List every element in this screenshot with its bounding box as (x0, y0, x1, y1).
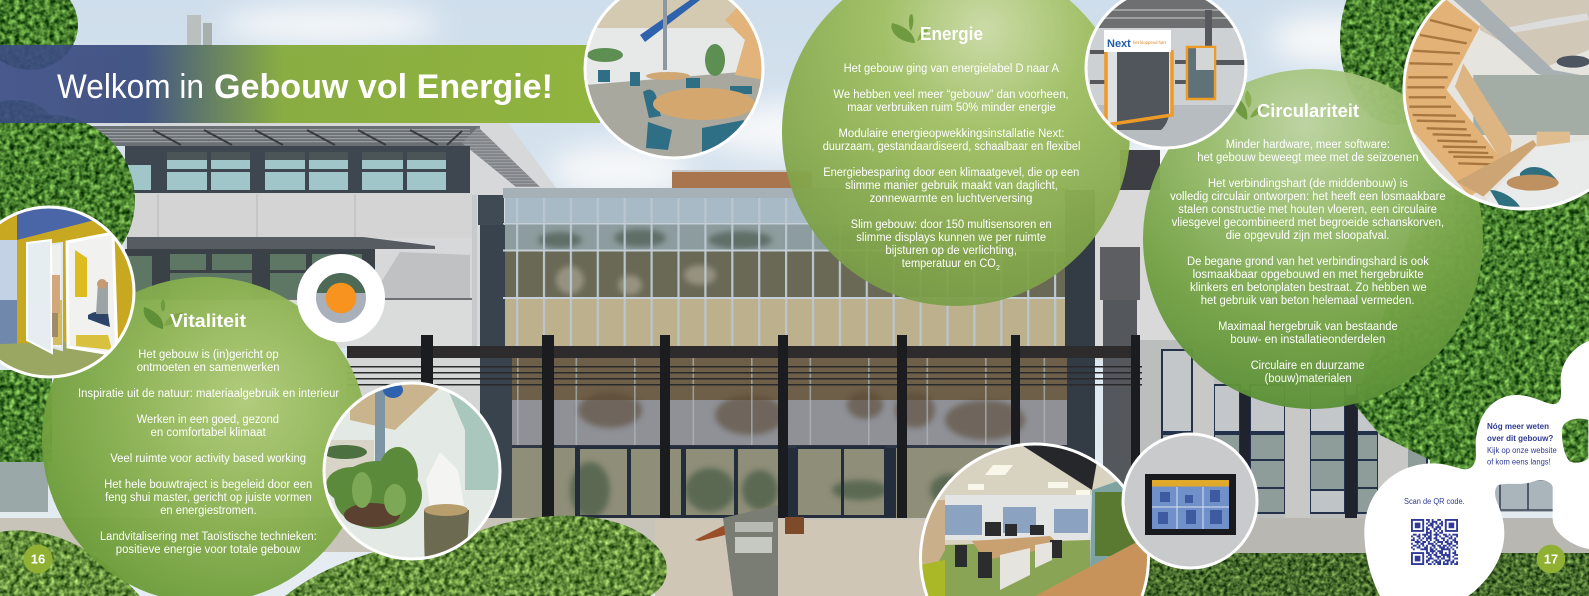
text: scan prompt: Scan de QR code. (1404, 496, 1465, 506)
text: Circulariteit bullets: Minder hardware, meer software: (1226, 139, 1390, 151)
text: Energie bullets: slimme displays kunnen we per ruimte (856, 232, 1046, 244)
text: Circulariteit bullets: losmaakbaar opgebouwd en met hergebruikte (1193, 269, 1424, 281)
text: Circulariteit bullets: het gebruik van beton helemaal vermeden. (1201, 295, 1414, 307)
text: Circulariteit bullets: De begane grond van het verbindingshard is ook (1187, 256, 1429, 268)
photo: Next installation (1086, 0, 1246, 150)
icon: target circle (297, 254, 385, 342)
text: Vitaliteit bullets: Werken in een goed, gezond (137, 414, 279, 426)
text: Circulariteit bullets: klinkers en betonplaten bestraat. Zo hebben we (1190, 282, 1427, 294)
text: Energie bullets: Het gebouw ging van energielabel D naar A (844, 63, 1059, 75)
heading: Vitaliteit: Vitaliteit (170, 311, 246, 331)
text: Vitaliteit bullets: Het gebouw is (in)gericht op (138, 349, 279, 361)
photo: open office (920, 444, 1150, 596)
text: more info: of kom eens langs! (1487, 457, 1551, 467)
photo: Next installation: Next (1107, 38, 1131, 50)
text: Circulariteit bullets: Het verbindingshart (de middenbouw) is (1208, 178, 1408, 190)
page number 17: 17 (1544, 552, 1558, 566)
heading: Energie: Energie (920, 24, 983, 44)
text: Energie bullets: maar verbruiken ruim 50% minder energie (847, 102, 1056, 114)
icon: leaves (891, 14, 929, 43)
text: Energie bullets: bijsturen op de verlichting, (885, 245, 1017, 257)
text: Vitaliteit bullets: ontmoeten en samenwerken (137, 362, 280, 374)
title banner (0, 45, 600, 123)
title: Welkom in (57, 68, 204, 106)
icon: leaves (144, 299, 183, 329)
text: more info: Kijk op onze website (1487, 445, 1557, 455)
text: Circulariteit bullets: stalen constructie met houten vloeren, een circulaire (1178, 204, 1437, 216)
icon: leaves (1233, 90, 1264, 120)
text: Circulariteit bullets: vliesgevel gecombineerd met begroeide schanskorven, (1172, 217, 1444, 229)
text: Energie bullets: 2 (996, 265, 1000, 272)
text: Vitaliteit bullets: Landvitalisering met Taoïstische technieken: (100, 531, 317, 543)
white info blob (1364, 341, 1589, 596)
text: Vitaliteit bullets: Veel ruimte voor activity based working (110, 453, 306, 465)
text: Energie bullets: Energiebesparing door een klimaatgevel, die op een (823, 167, 1079, 179)
text: more info: Nóg meer weten (1487, 421, 1549, 431)
text: Energie bullets: Slim gebouw: door 150 multisensoren en (851, 219, 1052, 231)
text: Circulariteit bullets: het gebouw beweegt mee met de seizoenen (1197, 152, 1419, 164)
text: Circulariteit bullets: (bouw)materialen (1264, 373, 1352, 385)
page number 17 (1537, 545, 1565, 573)
text: more info: over dit gebouw? (1487, 433, 1553, 443)
text: Vitaliteit bullets: positieve energie voor totale gebouw (116, 544, 301, 556)
photo: phone booths (0, 207, 134, 377)
text: Vitaliteit bullets: Inspiratie uit de natuur: materiaalgebruik en interieur (78, 388, 339, 400)
photo: plant and crystal (323, 382, 500, 562)
text: Energie bullets: duurzaam, gestandaardiseerd, schaalbaar en flexibel (823, 141, 1080, 153)
text: Circulariteit bullets: die opgevuld zijn met sloopafval. (1226, 230, 1390, 242)
text: Circulariteit bullets: Maximaal hergebruik van bestaande (1218, 321, 1398, 333)
text: more info (1487, 421, 1557, 467)
text: Energie bullets (823, 63, 1080, 272)
photo: Next installation: het kloppend hart (1133, 40, 1167, 45)
page number 16: 16 (31, 552, 45, 566)
text: Energie bullets: Modulaire energieopwekkingsinstallatie Next: (838, 128, 1064, 140)
text: Circulariteit bullets (1170, 139, 1446, 385)
photo: tablet display (1123, 434, 1257, 568)
text: Vitaliteit bullets: Het hele bouwtraject is begeleid door een (104, 479, 312, 491)
text: Circulariteit bullets: bouw- en installatieonderdelen (1230, 334, 1385, 346)
title bold part: Gebouw vol Energie! (214, 68, 553, 106)
text: Circulariteit bullets: volledig circulair ontworpen: het heeft een losmaakbare (1170, 191, 1446, 203)
page number 16 (24, 544, 52, 574)
photo: wooden staircase (1400, 0, 1589, 215)
text: Circulariteit bullets: Circulaire en duurzame (1251, 360, 1364, 372)
text: Vitaliteit bullets: en energiestromen. (160, 505, 257, 517)
text: Energie bullets: temperatuur en CO (902, 258, 996, 270)
text: Energie bullets: slimme manier gebruik maakt van daglicht, (845, 180, 1058, 192)
photo: cafe (585, 0, 765, 160)
sign monument (723, 505, 778, 596)
text: Vitaliteit bullets: en comfortabel klimaat (150, 427, 267, 439)
heading: Circulariteit: Circulariteit (1257, 101, 1359, 121)
text: Energie bullets: We hebben veel meer “gebouw” dan voorheen, (833, 89, 1069, 101)
panel: Energie (782, 0, 1130, 306)
panel: Vitaliteit (42, 277, 368, 596)
text: Vitaliteit bullets (78, 349, 339, 556)
text: Vitaliteit bullets: feng shui master, gericht op juiste vormen (105, 492, 312, 504)
text: Energie bullets: zonnewarmte en luchtverversing (870, 193, 1032, 205)
QR code (1411, 520, 1458, 564)
panel: Circulariteit (1143, 69, 1483, 409)
